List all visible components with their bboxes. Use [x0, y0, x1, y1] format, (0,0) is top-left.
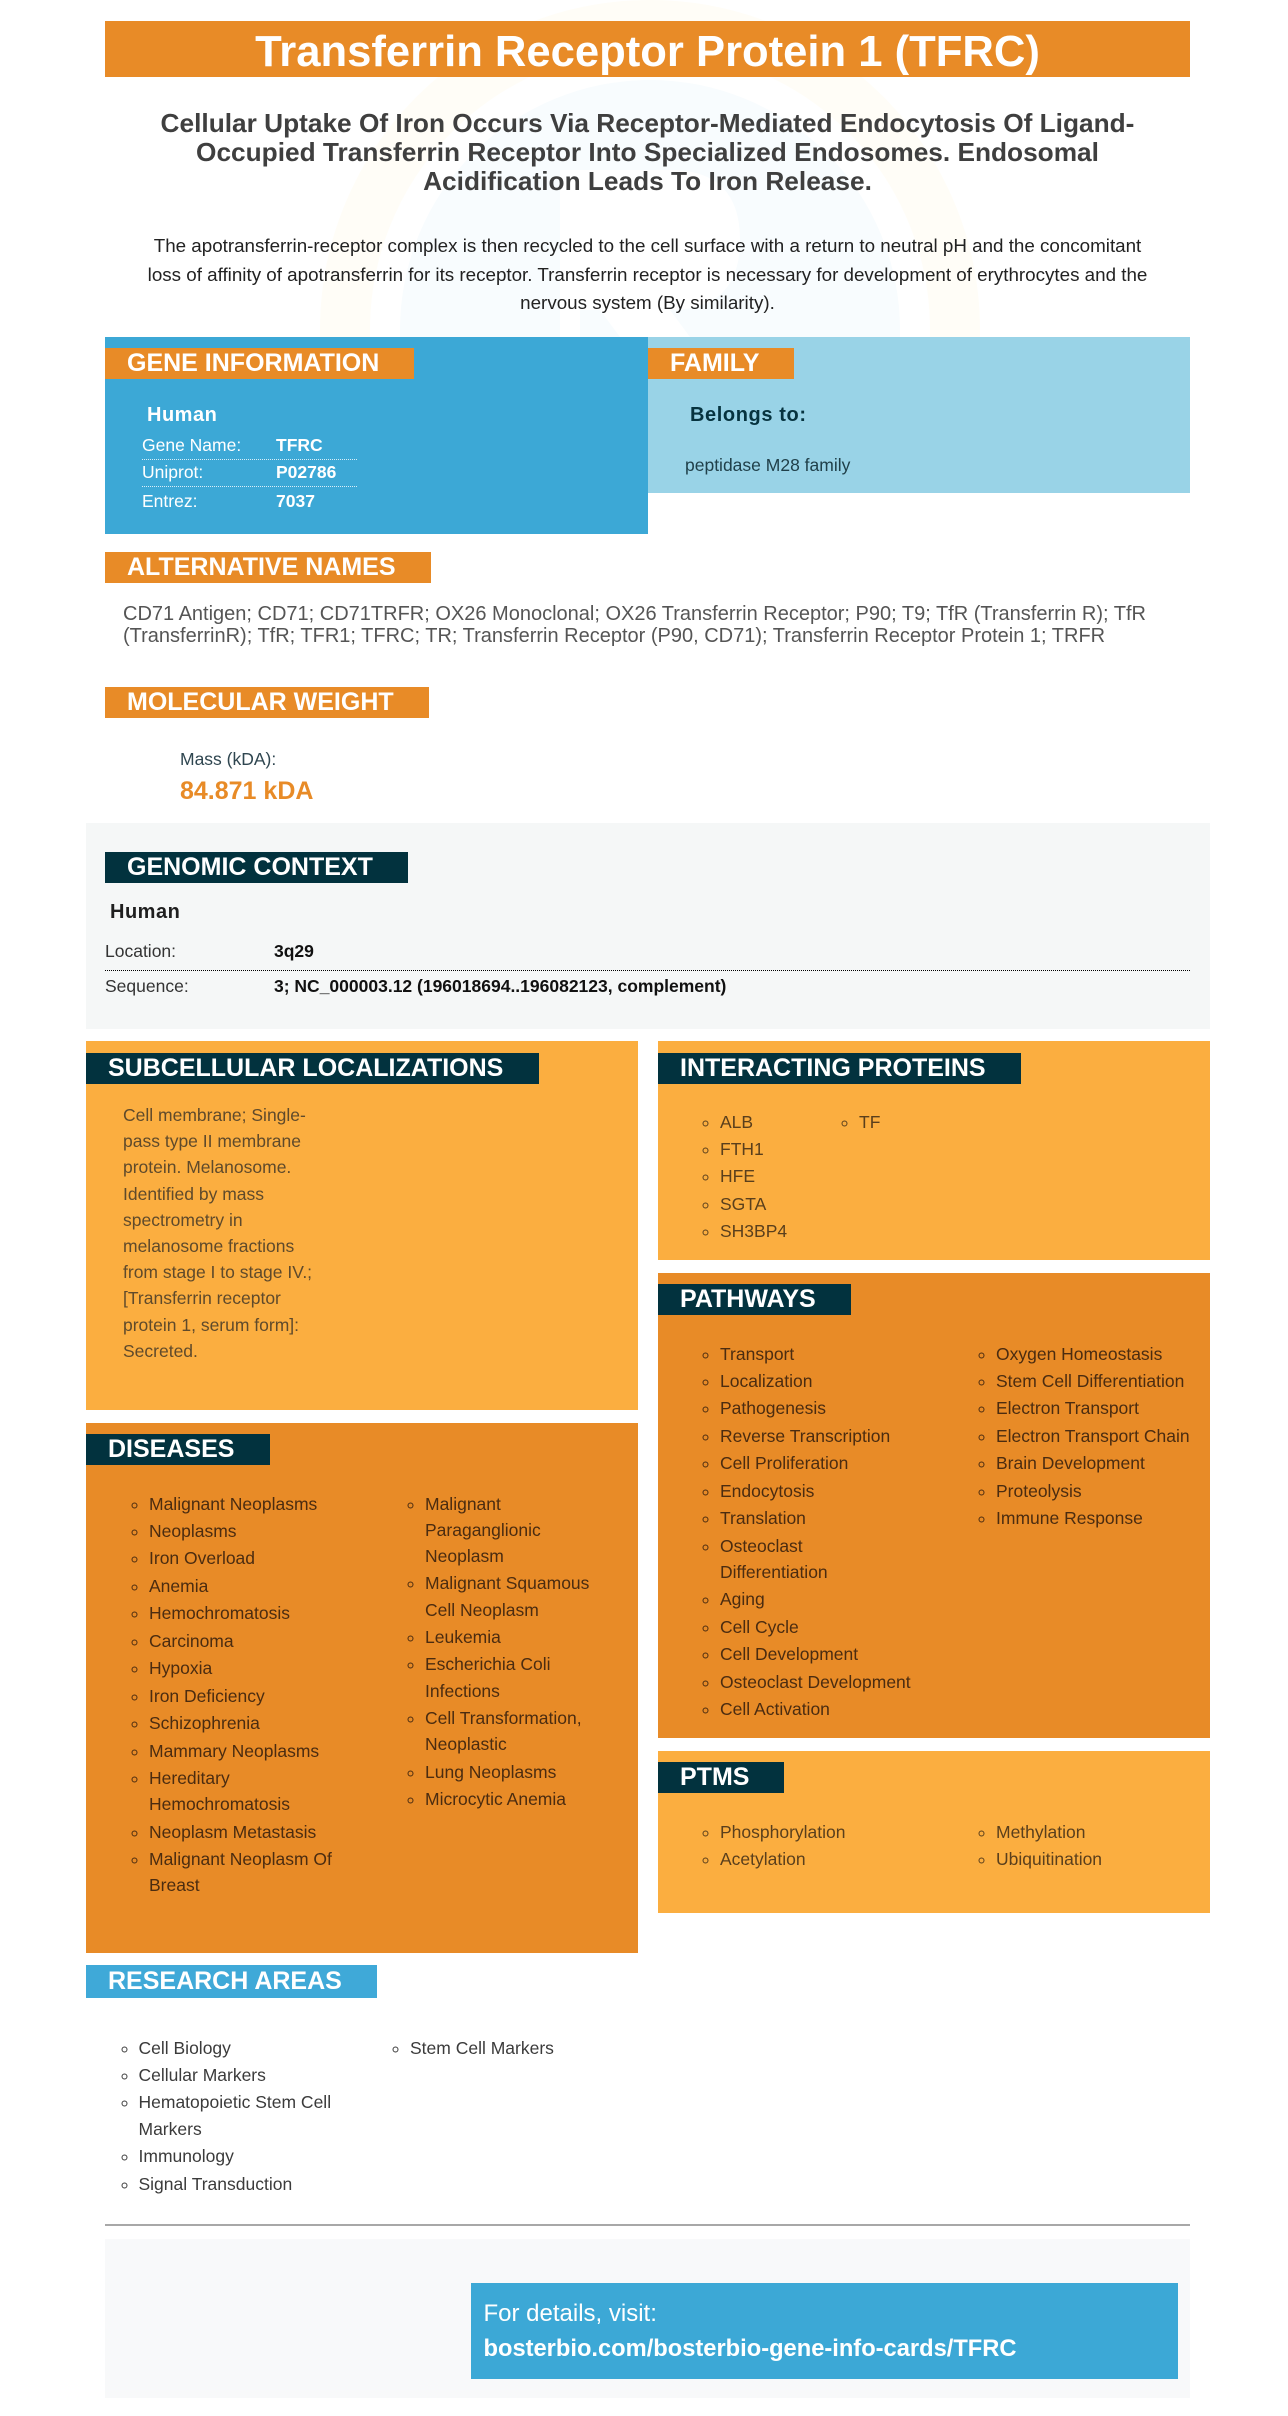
panel: interacting proteins	[658, 1041, 1210, 1260]
PTM list column 2	[978, 1822, 1102, 1869]
gene name row	[142, 433, 357, 460]
description paragraph: loss of affinity of apotransferrin for its receptor. Transferrin receptor is necessary for development of erythrocytes and the	[148, 264, 1147, 284]
protein list column 1: SH3BP4	[720, 1221, 787, 1241]
pathway list column 2: Electron Transport Chain	[996, 1426, 1190, 1446]
callout label: For details, visit:	[484, 2300, 657, 2327]
disease list column 1: Malignant Neoplasm Of	[149, 1849, 332, 1869]
research list column 2: Stem Cell Markers	[410, 2038, 554, 2058]
protein list column 1: ALB	[720, 1112, 753, 1132]
disease list column 1: Anemia	[149, 1576, 208, 1596]
disease list column 2: Cell Neoplasm	[425, 1600, 539, 1620]
entrez row: Entrez:	[142, 491, 197, 511]
location row	[105, 938, 1190, 971]
title banner	[105, 21, 1190, 77]
pathway list column 1: Cell Activation	[720, 1699, 830, 1719]
heading: diseases	[86, 1434, 270, 1465]
protein list column 2: TF	[859, 1112, 880, 1132]
panel: genomic context	[86, 823, 1210, 1029]
subtitle: Occupied Transferrin Receptor Into Specialized Endosomes. Endosomal	[196, 136, 1099, 166]
localization text	[123, 1105, 312, 1361]
disease list column 1: Neoplasms	[149, 1521, 237, 1541]
disease list column 2: Infections	[425, 1681, 500, 1701]
panel: footer	[105, 2239, 1190, 2398]
disease list column 1: Iron Deficiency	[149, 1686, 265, 1706]
sequence row: 3; NC_000003.12 (196018694..196082123, complement)	[274, 976, 726, 996]
heading: PTMs: PTMS	[680, 1763, 749, 1791]
pathway list column 1: Translation	[720, 1508, 806, 1528]
subtitle	[161, 108, 1134, 196]
belongs to label: Belongs to:	[690, 404, 807, 426]
disease list column 2: Leukemia	[425, 1627, 501, 1647]
pathway list column 1: Osteoclast	[720, 1536, 803, 1556]
localization text: Cell membrane; Single-	[123, 1105, 306, 1125]
heading: molecular weight: MOLECULAR WEIGHT	[127, 688, 394, 716]
disease list column 2: Malignant	[425, 1494, 501, 1514]
heading: family	[648, 348, 794, 379]
subtitle: Acidification Leads To Iron Release.	[423, 166, 872, 196]
heading: genomic context: GENOMIC CONTEXT	[127, 853, 373, 881]
description paragraph	[148, 235, 1147, 313]
uniprot row: P02786	[276, 462, 336, 482]
disease list column 2: Malignant Squamous	[425, 1573, 589, 1593]
mass value: 84.871 kDA	[180, 777, 313, 805]
disease list column 1: Neoplasm Metastasis	[149, 1822, 316, 1842]
entrez row: 7037	[276, 491, 315, 511]
disease list column 2: Paraganglionic	[425, 1520, 541, 1540]
pathway list column 2: Oxygen Homeostasis	[996, 1344, 1162, 1364]
pathway list column 2: Brain Development	[996, 1453, 1145, 1473]
disease list column 1: Iron Overload	[149, 1548, 255, 1568]
disease list column 2: Neoplasm	[425, 1546, 504, 1566]
disease list column 1: Hereditary	[149, 1768, 230, 1788]
subtitle: Cellular Uptake Of Iron Occurs Via Receptor-Mediated Endocytosis Of Ligand-	[161, 108, 1134, 138]
uniprot row: Uniprot:	[142, 462, 203, 482]
heading: pathways: PATHWAYS	[680, 1285, 816, 1313]
pathway list column 1: Endocytosis	[720, 1481, 814, 1501]
disease list column 1: Hemochromatosis	[149, 1794, 290, 1814]
pathway list column 1: Osteoclast Development	[720, 1672, 911, 1692]
disease list column 1: Breast	[149, 1875, 200, 1895]
panel: PTMs	[658, 1751, 1210, 1913]
protein list column 1	[702, 1112, 787, 1241]
pathway list column 1: Pathogenesis	[720, 1398, 826, 1418]
PTM list column 1: Acetylation	[720, 1849, 806, 1869]
PTM list column 1: Phosphorylation	[720, 1822, 846, 1842]
gene name row: Gene Name:	[142, 435, 241, 455]
panel: subcellular localizations	[86, 1041, 638, 1410]
sequence row: Sequence:	[105, 976, 189, 996]
heading: PTMs	[658, 1762, 784, 1793]
callout url: bosterbio.com/bosterbio-gene-info-cards/TFRC	[484, 2336, 1016, 2362]
localization text: spectrometry in	[123, 1210, 243, 1230]
heading: alternative names: ALTERNATIVE NAMES	[127, 553, 396, 581]
disease list column 2: Microcytic Anemia	[425, 1789, 566, 1809]
location row: Location:	[105, 941, 176, 961]
heading: research areas: RESEARCH AREAS	[108, 1967, 342, 1995]
panel: diseases	[86, 1423, 638, 1953]
callout: details link	[471, 2283, 1178, 2379]
disease list column 2: Neoplastic	[425, 1734, 507, 1754]
protein list column 1: FTH1	[720, 1139, 764, 1159]
species label: Human	[110, 901, 180, 923]
alternative names text	[123, 603, 1146, 647]
research list column 1: Cell Biology	[138, 2038, 231, 2058]
mass label: Mass (kDA):	[180, 749, 276, 769]
localization text: from stage I to stage IV.;	[123, 1262, 312, 1282]
pathway list column 1: Differentiation	[720, 1562, 828, 1582]
localization text: Secreted.	[123, 1341, 198, 1361]
research list column 1: Cellular Markers	[138, 2065, 266, 2085]
research list column 1: Immunology	[138, 2146, 234, 2166]
disease list column 2: Cell Transformation,	[425, 1708, 582, 1728]
entrez row	[142, 491, 315, 511]
uniprot row	[142, 460, 357, 487]
protein list column 1: HFE	[720, 1166, 755, 1186]
research list column 1	[122, 2038, 331, 2194]
research list column 1: Markers	[138, 2119, 202, 2139]
localization text: protein 1, serum form]:	[123, 1315, 299, 1335]
background watermark logo	[0, 0, 1288, 337]
pathway list column 1: Reverse Transcription	[720, 1426, 890, 1446]
disease list column 1	[132, 1494, 332, 1895]
pathway list column 2: Proteolysis	[996, 1481, 1082, 1501]
PTM list column 1	[702, 1822, 846, 1869]
heading: subcellular localizations: SUBCELLULAR LOCALIZATIONS	[108, 1054, 503, 1082]
heading: interacting proteins: INTERACTING PROTEINS	[680, 1054, 986, 1082]
localization text: protein. Melanosome.	[123, 1157, 291, 1177]
localization text: Identified by mass	[123, 1184, 264, 1204]
research list column 1: Signal Transduction	[138, 2174, 292, 2194]
heading: diseases: DISEASES	[108, 1435, 234, 1463]
panel: pathways	[658, 1273, 1210, 1738]
panel: gene information	[105, 337, 648, 534]
pathway list column 2	[978, 1344, 1190, 1528]
pathway list column 1: Cell Cycle	[720, 1617, 799, 1637]
heading: family: FAMILY	[670, 349, 759, 377]
disease list column 1: Malignant Neoplasms	[149, 1494, 317, 1514]
heading: gene information: GENE INFORMATION	[127, 349, 379, 377]
localization text: [Transferrin receptor	[123, 1288, 281, 1308]
alternative names text: CD71 Antigen; CD71; CD71TRFR; OX26 Monoclonal; OX26 Transferrin Receptor; P90; T9; TfR (Transferrin R); TfR	[123, 603, 1146, 625]
disease list column 1: Mammary Neoplasms	[149, 1741, 319, 1761]
species label: Human	[147, 404, 217, 426]
family value: peptidase M28 family	[685, 455, 850, 475]
localization text: melanosome fractions	[123, 1236, 294, 1256]
pathway list column 1: Cell Development	[720, 1644, 858, 1664]
title banner: Transferrin Receptor Protein 1 (TFRC)	[255, 28, 1040, 76]
disease list column 2: Lung Neoplasms	[425, 1762, 556, 1782]
pathway list column 1: Aging	[720, 1589, 765, 1609]
description paragraph: nervous system (By similarity).	[520, 292, 775, 313]
gene name row: TFRC	[276, 435, 323, 455]
pathway list column 1: Transport	[720, 1344, 794, 1364]
heading: research areas	[86, 1965, 377, 1998]
pathway list column 2: Stem Cell Differentiation	[996, 1371, 1184, 1391]
heading: pathways	[658, 1284, 851, 1315]
disease list column 1: Carcinoma	[149, 1631, 234, 1651]
pathway list column 2: Electron Transport	[996, 1398, 1139, 1418]
description paragraph: The apotransferrin-receptor complex is then recycled to the cell surface with a return to neutral pH and the concomitant	[154, 235, 1141, 256]
disease list column 1: Hemochromatosis	[149, 1603, 290, 1623]
disease list column 1: Hypoxia	[149, 1658, 212, 1678]
panel: family	[648, 337, 1190, 493]
protein list column 1: SGTA	[720, 1194, 766, 1214]
PTM list column 2: Ubiquitination	[996, 1849, 1102, 1869]
disease list column 2: Escherichia Coli	[425, 1654, 550, 1674]
disease list column 1: Schizophrenia	[149, 1713, 260, 1733]
localization text: pass type II membrane	[123, 1131, 301, 1151]
research list column 1: Hematopoietic Stem Cell	[138, 2092, 331, 2112]
location row: 3q29	[274, 941, 314, 961]
disease list column 2	[408, 1494, 589, 1809]
pathway list column 1: Localization	[720, 1371, 812, 1391]
pathway list column 2: Immune Response	[996, 1508, 1143, 1528]
pathway list column 1: Cell Proliferation	[720, 1453, 848, 1473]
alternative names text: (TransferrinR); TfR; TFR1; TFRC; TR; Transferrin Receptor (P90, CD71); Transferrin Receptor Protein 1; TRFR	[123, 625, 1105, 647]
PTM list column 2: Methylation	[996, 1822, 1086, 1842]
pathway list column 1	[702, 1344, 911, 1719]
